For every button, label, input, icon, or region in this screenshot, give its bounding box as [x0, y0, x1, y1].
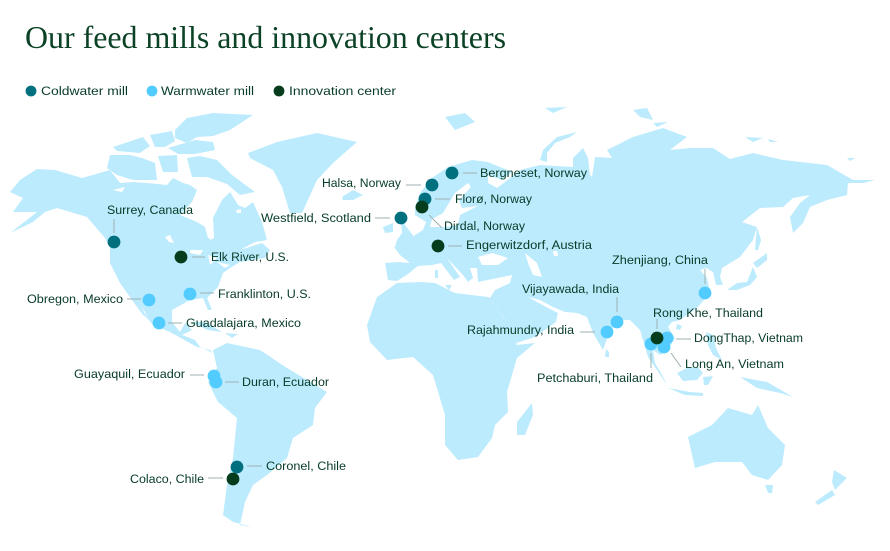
marker: Surrey, Canada: Surrey, Canada — [107, 203, 193, 217]
legend: coldwater mill: Coldwater mill — [41, 84, 128, 98]
land: arctic russian islands — [445, 107, 855, 162]
water: caspian sea — [525, 253, 542, 277]
marker: Elk River, U.S. — [175, 250, 289, 264]
marker: Guadalajara, Mexico: Guadalajara, Mexico — [186, 316, 301, 330]
marker: Colaco, Chile: Colaco, Chile — [130, 472, 204, 486]
marker: Vijayawada, India — [522, 282, 623, 328]
title: Our feed mills and innovation centers — [25, 19, 506, 55]
land: hokkaido — [753, 253, 767, 268]
water: aral sea — [553, 251, 558, 256]
marker: Rong Khe, Thailand — [651, 306, 763, 344]
marker: Surrey, Canada — [107, 203, 193, 248]
marker: Westfield, Scotland: Westfield, Scotland — [261, 211, 371, 225]
legend — [26, 84, 396, 98]
marker: Bergneset, Norway: Bergneset, Norway — [480, 166, 588, 180]
water: black sea — [478, 253, 508, 265]
marker: Coronel, Chile: Coronel, Chile — [266, 459, 346, 473]
land: sri lanka — [605, 349, 609, 357]
legend: innovation center: Innovation center — [289, 84, 396, 98]
marker: Obregon, Mexico: Obregon, Mexico — [27, 292, 123, 306]
land: australia — [688, 405, 785, 480]
land: south america — [208, 343, 327, 527]
land: north america — [10, 169, 270, 353]
marker: DongThap, Vietnam: DongThap, Vietnam — [694, 331, 803, 345]
marker: Guayaquil, Ecuador: Guayaquil, Ecuador — [74, 367, 185, 381]
marker: Petchaburi, Thailand: Petchaburi, Thailand — [537, 371, 653, 385]
marker: Long An, Vietnam: Long An, Vietnam — [685, 357, 784, 371]
water: hudson bay — [182, 195, 216, 238]
land: japan — [727, 267, 757, 290]
marker: Duran, Ecuador: Duran, Ecuador — [242, 375, 329, 389]
legend: warmwater mill: Warmwater mill — [161, 84, 254, 98]
land: new zealand — [815, 470, 847, 505]
marker: Florø, Norway: Florø, Norway — [455, 192, 533, 206]
marker: Dirdal, Norway — [416, 201, 526, 233]
land: africa — [367, 282, 535, 460]
marker: Elk River, U.S.: Elk River, U.S. — [211, 250, 289, 264]
land: madagascar — [517, 403, 533, 435]
marker: Florø, Norway — [419, 192, 533, 206]
world map — [10, 107, 875, 527]
marker: Halsa, Norway: Halsa, Norway — [322, 176, 402, 190]
marker: Rajahmundry, India: Rajahmundry, India — [467, 323, 574, 337]
marker: Coronel, Chile — [231, 459, 346, 473]
land: greenland — [248, 133, 357, 213]
marker: Dirdal, Norway: Dirdal, Norway — [444, 219, 526, 233]
land: tasmania — [765, 485, 773, 493]
water: lakes and gulfs — [113, 187, 241, 318]
land: southeast asia islands — [668, 227, 793, 397]
land: british isles — [383, 212, 415, 247]
marker: Franklinton, U.S.: Franklinton, U.S. — [218, 287, 311, 301]
marker: Long An, Vietnam — [658, 341, 784, 371]
marker: Rong Khe, Thailand: Rong Khe, Thailand — [653, 306, 763, 320]
marker: Petchaburi, Thailand — [537, 338, 657, 385]
marker: Guayaquil, Ecuador — [74, 367, 220, 382]
land: iceland — [342, 190, 363, 200]
water: baltic sea — [430, 183, 478, 227]
marker: Vijayawada, India: Vijayawada, India — [522, 282, 619, 296]
land: canadian arctic islands — [107, 113, 255, 195]
marker: Halsa, Norway — [322, 176, 438, 191]
marker: Zhenjiang, China: Zhenjiang, China — [612, 253, 708, 267]
land: mediterranean islands — [435, 270, 452, 290]
marker: Colaco, Chile — [130, 472, 239, 486]
land: caribbean — [190, 322, 238, 338]
land: eurasia — [385, 128, 875, 385]
marker: Zhenjiang, China — [612, 253, 711, 299]
marker: Engerwitzdorf, Austria: Engerwitzdorf, Austria — [466, 238, 592, 252]
marker: Rajahmundry, India — [467, 323, 613, 338]
